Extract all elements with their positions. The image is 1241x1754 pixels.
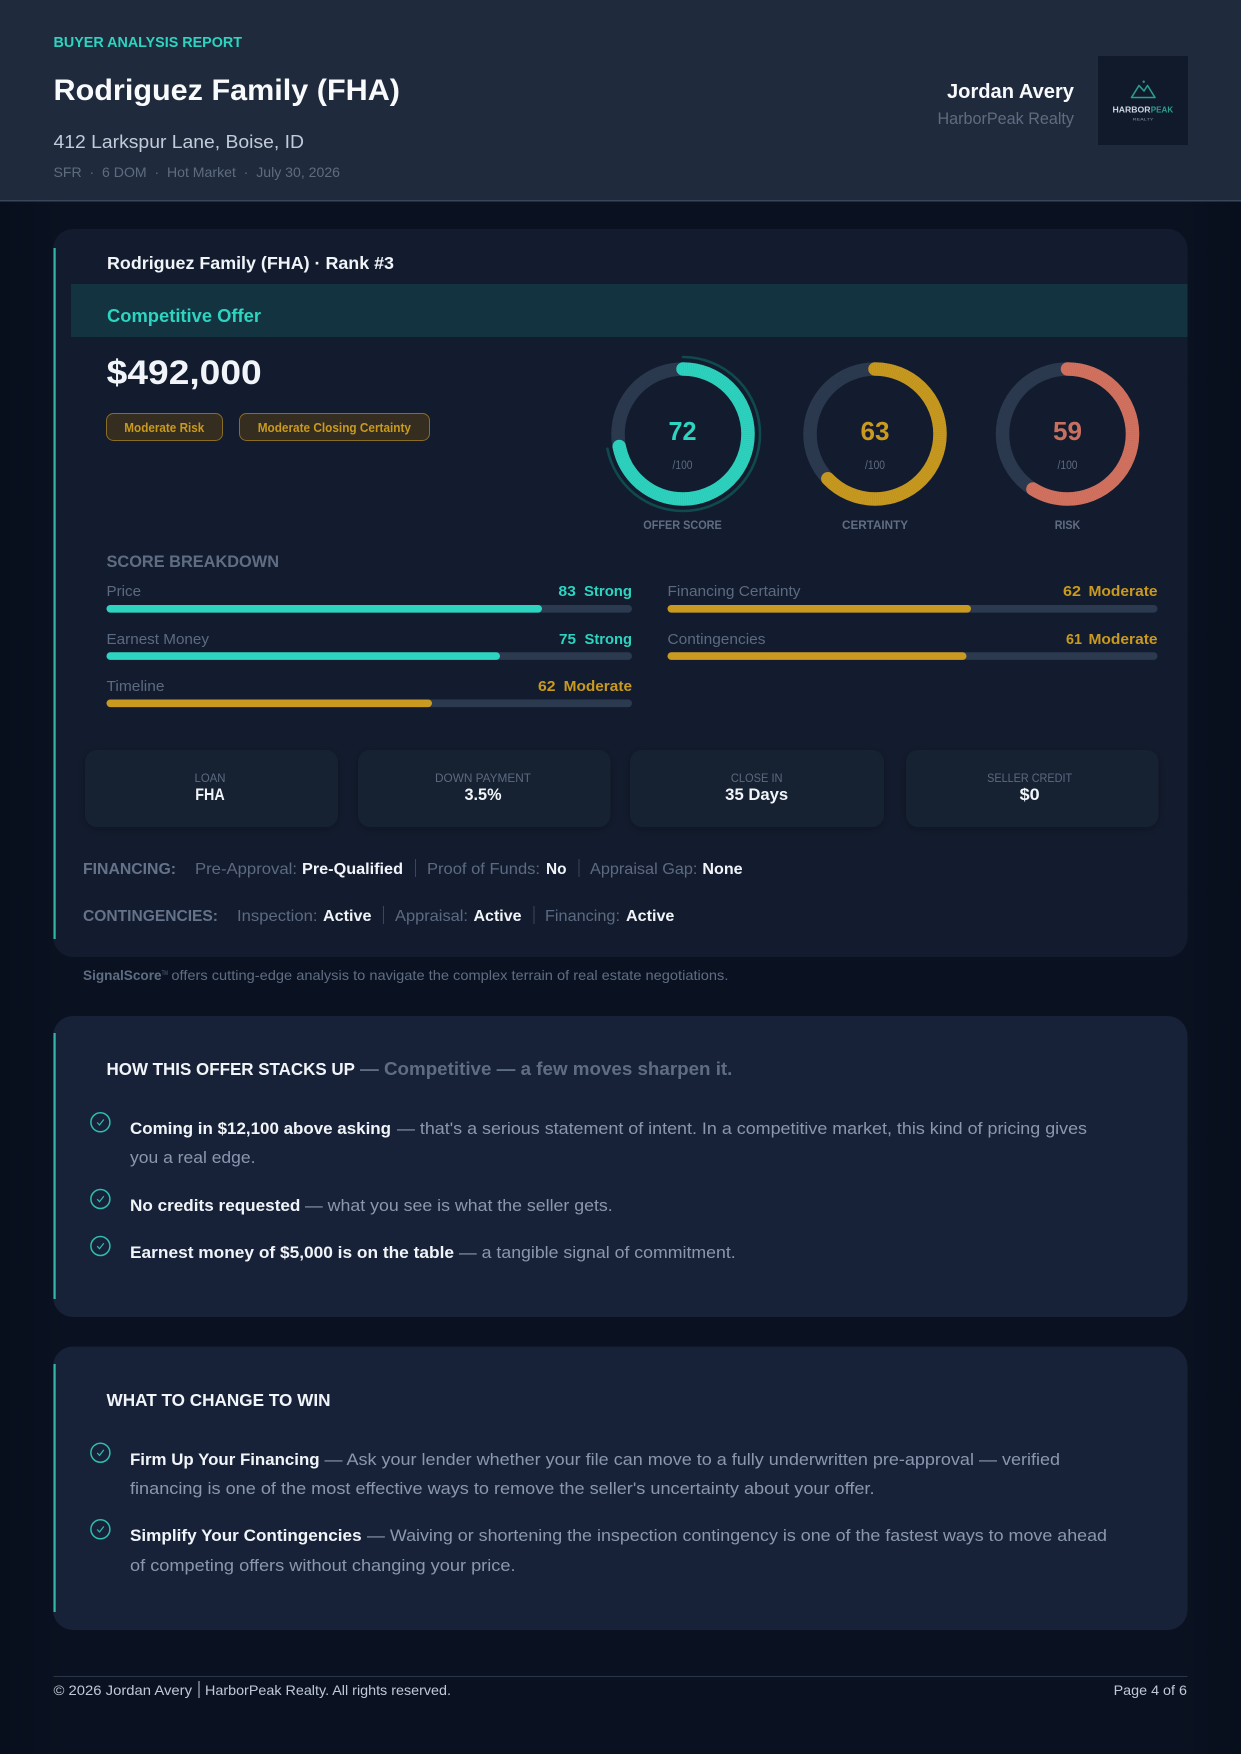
copyright: HarborPeak Realty. All rights reserved.: [205, 1683, 451, 1698]
stat card: loan: [85, 750, 338, 827]
bar: timeline: Moderate: [564, 679, 632, 695]
offer status band: [71, 284, 1188, 337]
stat card: down payment: [358, 750, 610, 827]
badge: moderate closing certainty: Moderate Closing Certainty: [258, 421, 411, 435]
list item: simplify contingencies: [130, 1526, 1107, 1575]
page number: Page 4 of 6: [1114, 1683, 1187, 1698]
address: 412 Larkspur Lane, Boise, ID: [54, 131, 304, 152]
rank heading: Rodriguez Family (FHA) · Rank #3: [107, 253, 394, 273]
stat card: loan: FHA: [195, 786, 225, 804]
eyebrow label: BUYER ANALYSIS REPORT: [54, 35, 242, 51]
financing row: [83, 859, 743, 878]
bar: contingencies: 61: [1066, 632, 1082, 648]
brokerage name: HarborPeak Realty: [938, 109, 1075, 128]
copyright: [54, 1681, 451, 1698]
list item: simplify contingencies: Simplify Your Contingencies: [130, 1526, 362, 1545]
panel heading: WHAT TO CHANGE TO WIN: [106, 1390, 330, 1410]
stat card: seller credit: [906, 750, 1158, 827]
contingencies row: Financing:: [545, 908, 620, 925]
contingencies row: CONTINGENCIES:: [83, 908, 218, 925]
list item: earnest money: Earnest money of $5,000 is on the table: [130, 1243, 454, 1262]
bar: contingencies: [668, 632, 1158, 660]
bar: contingencies: Contingencies: [668, 632, 766, 648]
panel heading: HOW THIS OFFER STACKS UP: [106, 1059, 355, 1079]
copyright: © 2026 Jordan Avery: [54, 1683, 192, 1698]
list item: above asking: you a real edge.: [130, 1148, 256, 1167]
title: Rodriguez Family (FHA): [54, 74, 400, 107]
stat card: down payment: DOWN PAYMENT: [435, 773, 531, 785]
bar: financing certainty: [668, 584, 1158, 613]
bar: financing certainty: 62: [1063, 584, 1081, 600]
gauge: risk: [1002, 369, 1132, 532]
list item: no credits: No credits requested: [130, 1196, 300, 1215]
contingencies row: Active: [323, 908, 372, 925]
financing row: Pre-Qualified: [302, 861, 403, 878]
list item: no credits: — what you see is what the seller gets.: [305, 1196, 613, 1215]
gauge: certainty: CERTAINTY: [842, 520, 908, 532]
list item: above asking: Coming in $12,100 above asking: [130, 1119, 391, 1138]
score breakdown heading: SCORE BREAKDOWN: [106, 553, 279, 571]
stat card: loan: LOAN: [194, 773, 226, 785]
bar: contingencies: Moderate: [1088, 632, 1158, 648]
gauge: certainty: [810, 369, 940, 532]
list item: simplify contingencies: — Waiving or shortening the inspection contingency is one of the fastest ways to move ahead: [367, 1526, 1107, 1545]
gauge: offer score: /100: [672, 460, 692, 472]
bar: timeline: [106, 679, 632, 707]
badge: moderate risk: Moderate Risk: [124, 421, 204, 435]
icon: check: [91, 1520, 110, 1539]
header band: [0, 0, 1241, 202]
badge: moderate closing certainty: [240, 414, 430, 440]
list item: earnest money: [130, 1243, 736, 1262]
gauge: risk: 59: [1053, 416, 1082, 446]
bar: earnest money: [106, 632, 632, 660]
icon: HarborPeak logo: PEAK: [1151, 104, 1174, 114]
bar: earnest money: Strong: [584, 632, 632, 648]
bar: price: Strong: [584, 584, 632, 600]
list item: firm up financing: Firm Up Your Financing: [130, 1450, 320, 1469]
offer price: $492,000: [107, 354, 262, 392]
property meta: SFR · 6 DOM · Hot Market · July 30, 2026: [54, 165, 340, 180]
list item: simplify contingencies: of competing offers without changing your price.: [130, 1556, 516, 1575]
list item: earnest money: — a tangible signal of commitment.: [459, 1243, 736, 1262]
financing row: FINANCING:: [83, 861, 176, 878]
bar: financing certainty: Financing Certainty: [668, 584, 801, 600]
gauge: certainty: /100: [865, 460, 885, 472]
panel: offer summary: [53, 229, 1188, 957]
gauge: offer score: 72: [668, 416, 696, 446]
bar: timeline: 62: [538, 679, 556, 695]
list item: firm up financing: — Ask your lender whether your file can move to a fully underwritten pre-approval — verified: [324, 1450, 1060, 1469]
bar: earnest money: Earnest Money: [106, 632, 210, 648]
contingencies row: [83, 906, 675, 925]
bar: price: 83: [558, 584, 576, 600]
stat card: seller credit: SELLER CREDIT: [987, 773, 1072, 785]
bar: financing certainty: Moderate: [1088, 584, 1158, 600]
list item: above asking: — that's a serious statement of intent. In a competitive market, this kind of pricing gives: [397, 1119, 1087, 1138]
contingencies row: Inspection:: [237, 908, 318, 925]
panel: what to change to win: [53, 1346, 1188, 1630]
contingencies row: Active: [626, 908, 675, 925]
footer: [54, 1676, 1188, 1698]
bar: earnest money: 75: [559, 632, 576, 648]
financing row: No: [546, 861, 566, 878]
panel: how this offer stacks up: [53, 1016, 1188, 1317]
gauge: risk: /100: [1058, 460, 1078, 472]
offer status band: Competitive Offer: [107, 305, 261, 326]
gauge: risk: RISK: [1055, 520, 1081, 532]
bar: price: [106, 584, 632, 613]
contingencies row: Active: [474, 908, 522, 925]
icon: HarborPeak logo: [1098, 56, 1188, 145]
icon: check: [91, 1236, 110, 1256]
stat card: seller credit: $0: [1020, 786, 1040, 804]
icon: HarborPeak logo: REALTY: [1132, 118, 1155, 122]
gauge: offer score: [606, 357, 760, 532]
icon: HarborPeak logo: HARBOR: [1112, 104, 1150, 114]
list item: firm up financing: financing is one of the most effective ways to remove the seller's uncertainty about your offer.: [130, 1479, 874, 1498]
footnote: SignalScore disclaimer: SignalScore: [83, 968, 162, 983]
panel heading: [106, 1059, 732, 1079]
financing row: Proof of Funds:: [427, 861, 540, 878]
stat card: close in: CLOSE IN: [731, 773, 783, 785]
icon: check: [91, 1113, 110, 1132]
stat card: close in: [630, 750, 884, 827]
contingencies row: Appraisal:: [395, 908, 468, 925]
list item: firm up financing: [130, 1450, 1060, 1498]
footnote: SignalScore disclaimer: offers cutting-edge analysis to navigate the complex terrain of real estate negotiations.: [171, 968, 728, 983]
footnote: SignalScore disclaimer: TM: [162, 971, 168, 977]
gauge: certainty: 63: [860, 416, 890, 446]
icon: check: [91, 1443, 110, 1462]
financing row: Pre-Approval:: [195, 861, 297, 878]
financing row: None: [702, 861, 743, 878]
agent name: Jordan Avery: [947, 80, 1075, 103]
icon: check: [91, 1190, 110, 1208]
list item: no credits: [130, 1196, 613, 1215]
stat card: down payment: 3.5%: [464, 786, 502, 804]
bar: timeline: Timeline: [106, 679, 164, 695]
financing row: Appraisal Gap:: [590, 861, 697, 878]
list item: above asking: [130, 1119, 1087, 1167]
gauge: offer score: OFFER SCORE: [643, 520, 722, 532]
stat card: close in: 35 Days: [725, 786, 788, 804]
bar: price: Price: [106, 584, 141, 600]
panel heading: — Competitive — a few moves sharpen it.: [360, 1059, 732, 1079]
badge: moderate risk: [106, 414, 222, 440]
